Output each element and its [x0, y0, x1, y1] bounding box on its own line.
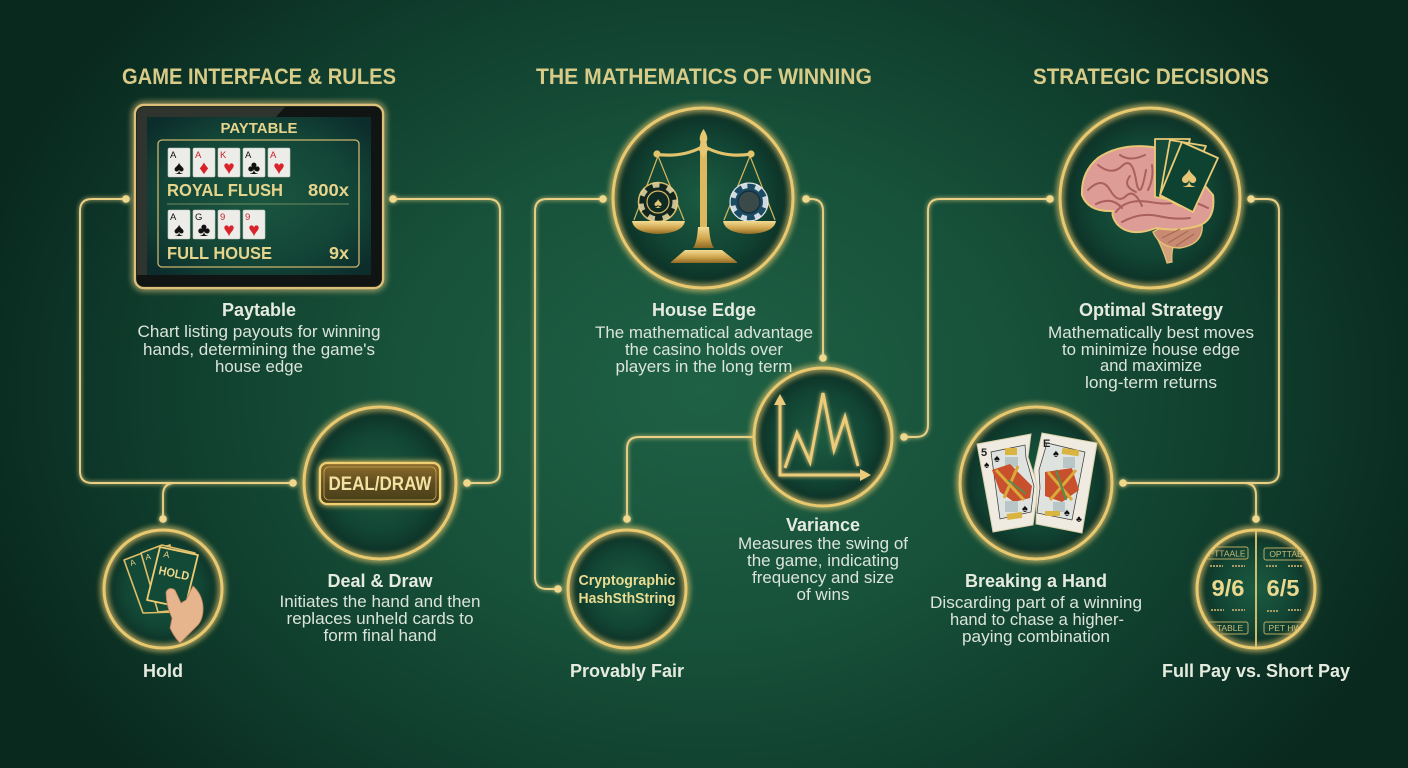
text block: breaking a hand [930, 571, 1142, 646]
text block: variance: of wins [796, 586, 850, 604]
text block: variance: the game, indicating [747, 552, 899, 570]
royal flush cards [168, 148, 290, 179]
left card half [977, 434, 1038, 532]
text block: variance: frequency and size [752, 569, 894, 587]
full house cards: ♣ [198, 220, 210, 241]
icon: full pay versus short pay: PET HW [1269, 623, 1301, 633]
icon: scales of house edge [613, 108, 793, 288]
full house cards: 9 [220, 212, 225, 223]
royal flush cards: ♠ [174, 158, 184, 179]
text block: optimal strategy: long-term returns [1085, 374, 1217, 392]
royal flush cards: A [270, 150, 277, 161]
text block: variance: Variance [786, 515, 860, 535]
label: hold: Hold [143, 661, 183, 681]
pay ratio 9/6: 9/6 [1212, 575, 1244, 601]
panel: paytable tablet [135, 105, 383, 288]
text block: paytable: hands, determining the game's [143, 341, 375, 359]
icon: cryptographic hash: Cryptographic [578, 573, 676, 589]
scale chains [634, 156, 775, 220]
royal flush cards: A [195, 150, 202, 161]
full house cards: ♥ [248, 220, 260, 241]
text block: paytable: Paytable [222, 300, 296, 320]
full house row: FULL HOUSE [167, 243, 272, 263]
royal flush row: ROYAL FLUSH [167, 180, 283, 200]
pay ratio 6/5: 6/5 [1266, 575, 1300, 601]
full house cards: A [170, 212, 177, 223]
icon: full pay versus short pay: OPTTAB [1269, 549, 1303, 559]
text block: deal and draw: replaces unheld cards to [286, 610, 474, 628]
right card half: ♠ [1064, 507, 1070, 519]
heading: strategic decisions: STRATEGIC DECISIONS [1033, 64, 1269, 89]
paytable title: PAYTABLE [220, 120, 298, 137]
label: full pay vs short pay: Full Pay vs. Short Pay [1162, 661, 1350, 681]
text block: breaking a hand: hand to chase a higher- [950, 611, 1124, 629]
heading: game interface and rules: GAME INTERFACE & RULES [122, 64, 396, 89]
royal flush cards: ♣ [248, 158, 260, 179]
right casino chip [730, 183, 768, 221]
royal flush cards: ♥ [273, 158, 285, 179]
icon: broken hand cards [960, 407, 1112, 559]
icon: hold cards and hand: HOLD [157, 563, 191, 583]
right card half: ♣ [1076, 514, 1082, 524]
full house cards: G [195, 212, 202, 223]
icon: deal and draw button [304, 407, 456, 559]
icon: brain with cards [1060, 108, 1240, 288]
text block: house edge: House Edge [652, 300, 756, 320]
full house payout: 9x [329, 243, 349, 263]
text block: breaking a hand: Discarding part of a winning [930, 594, 1142, 612]
icon: full pay versus short pay: PTTAALE [1208, 548, 1246, 558]
royal flush cards: A [170, 150, 177, 161]
icon: variance chart [754, 368, 892, 506]
text block: deal and draw: form final hand [324, 627, 436, 645]
royal flush cards: ♦ [199, 158, 209, 179]
text block: paytable [138, 300, 380, 376]
royal flush payout: 800x [308, 180, 349, 200]
text block: variance [738, 515, 908, 604]
icon: deal and draw button: DEAL/DRAW [328, 474, 432, 495]
icon: full pay versus short pay [1197, 530, 1315, 648]
icon: hold cards and hand: A [145, 552, 152, 562]
left casino chip: ♠ [654, 195, 662, 212]
left card half: ♠ [984, 460, 990, 471]
royal flush cards: K [220, 150, 227, 161]
icon: hold cards and hand: A [129, 557, 137, 568]
text block: breaking a hand: paying combination [962, 628, 1110, 646]
text block: variance: Measures the swing of [738, 535, 908, 553]
text block: deal and draw: Initiates the hand and then [280, 593, 480, 611]
text block: optimal strategy: Optimal Strategy [1079, 300, 1223, 320]
left card half: ♠ [994, 453, 1000, 465]
text block: optimal strategy [1048, 300, 1254, 392]
spade pip: ♠ [1181, 161, 1197, 194]
text block: house edge: The mathematical advantage [595, 324, 813, 342]
right card half: ♠ [1053, 448, 1059, 460]
left card half: ♠ [1022, 503, 1028, 515]
paytable inner frame [158, 140, 359, 267]
text block: optimal strategy: to minimize house edge [1062, 341, 1240, 359]
label: provably fair: Provably Fair [570, 661, 684, 681]
text block: house edge: players in the long term [616, 358, 792, 376]
left card half: 5 [981, 447, 987, 459]
royal flush cards: ♥ [223, 158, 235, 179]
icon: cryptographic hash: HashSthString [578, 591, 676, 607]
heading: mathematics of winning: THE MATHEMATICS OF WINNING [536, 64, 872, 89]
text block: optimal strategy: and maximize [1100, 357, 1202, 375]
icon: cryptographic hash [568, 530, 686, 648]
full house cards [168, 210, 265, 241]
brain [1082, 146, 1213, 263]
text block: paytable: Chart listing payouts for winning [138, 323, 380, 341]
text block: deal and draw: Deal & Draw [327, 571, 434, 591]
left casino chip [638, 182, 678, 222]
connector lines [80, 195, 1279, 593]
full house cards: 9 [245, 212, 250, 223]
text block: house edge: the casino holds over [625, 341, 784, 359]
text block: breaking a hand: Breaking a Hand [965, 571, 1107, 591]
text block: optimal strategy: Mathematically best moves [1048, 324, 1254, 342]
royal flush cards: A [245, 150, 252, 161]
full house cards: ♥ [223, 220, 235, 241]
icon: full pay versus short pay: TABLE [1217, 623, 1243, 633]
fanned cards [1155, 139, 1218, 212]
right card half [1034, 433, 1097, 533]
right card half: E [1043, 438, 1050, 450]
icon: hold cards and hand: A [163, 549, 170, 560]
text block: deal and draw [280, 571, 480, 645]
text block: house edge [595, 300, 813, 376]
text block: paytable: house edge [215, 358, 303, 376]
full house cards: ♠ [174, 220, 184, 241]
icon: hold cards and hand [104, 530, 222, 648]
